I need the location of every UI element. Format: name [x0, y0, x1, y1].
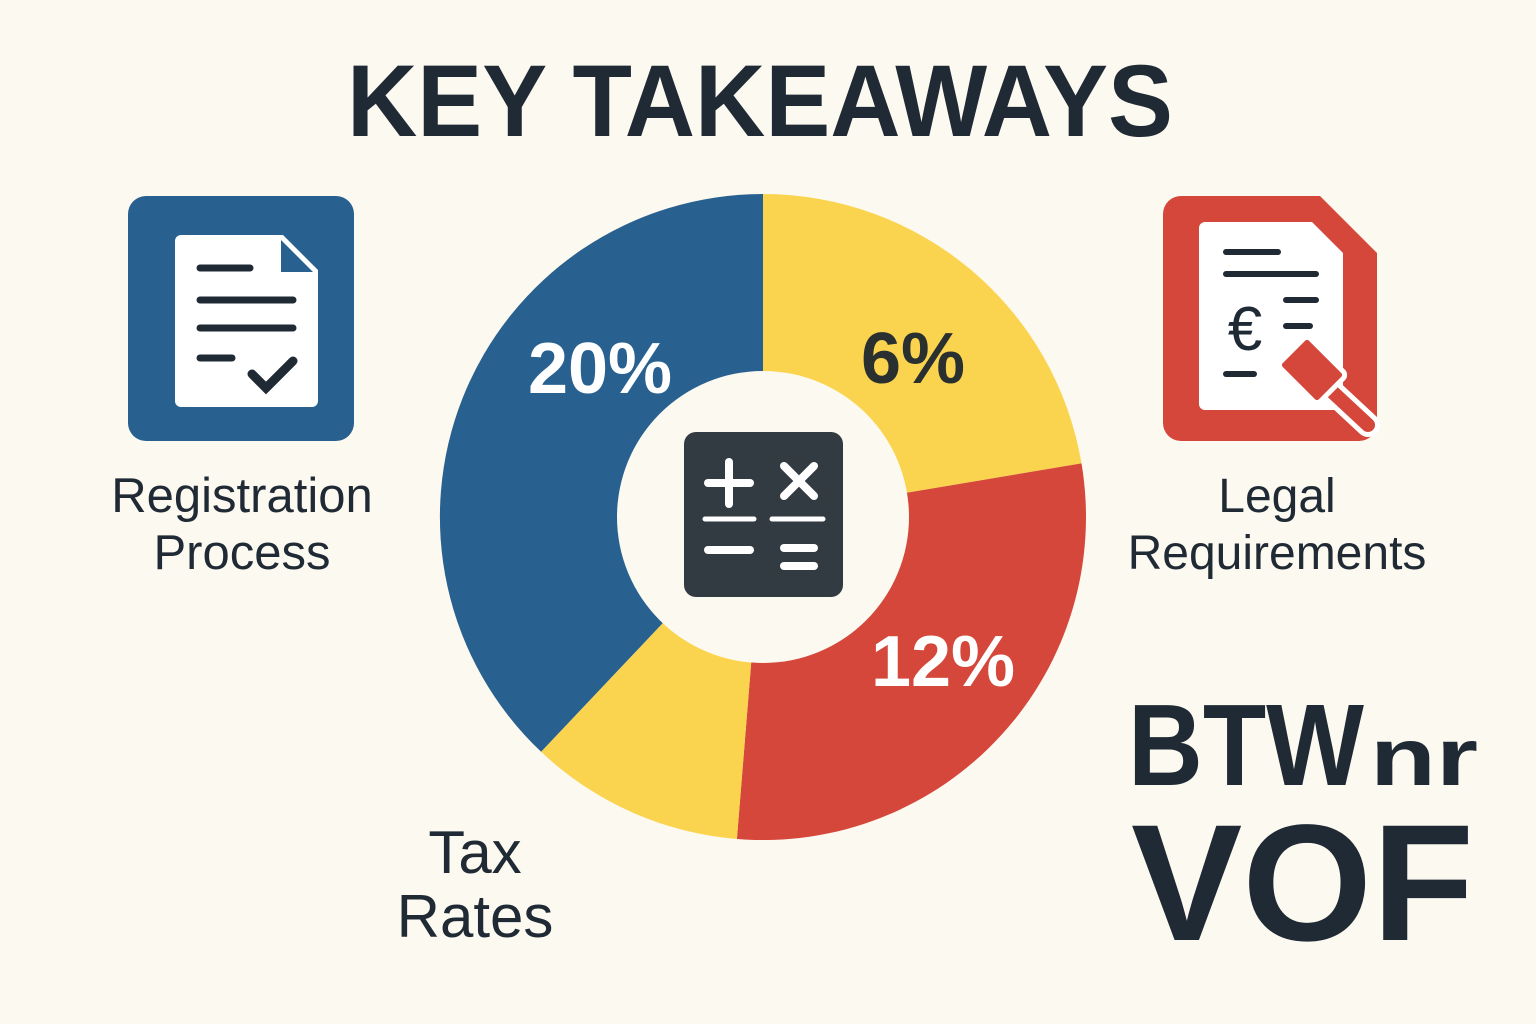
label: 6%: 6% [861, 319, 965, 399]
text: Registration Process: Registration [111, 469, 373, 523]
text: Legal Requirements: Requirements [1128, 527, 1426, 580]
chart: donut [440, 194, 1086, 840]
icon: registration document [128, 196, 354, 441]
icon: legal document: € [1228, 295, 1262, 364]
text: BTW nr VOF: BTW [1128, 680, 1364, 810]
label: 20%: 20% [528, 329, 672, 409]
text: BTW nr VOF: VOF [1131, 791, 1474, 976]
title: KEY TAKEAWAYS [347, 44, 1173, 158]
text: BTW nr VOF [1128, 680, 1478, 976]
text: Legal Requirements: Legal [1218, 470, 1336, 523]
text: Tax Rates: Rates [397, 883, 553, 950]
text: Registration Process: Process [153, 526, 331, 580]
text: BTW nr VOF: nr [1370, 712, 1478, 803]
icon: legal document [1163, 196, 1377, 441]
text: Tax Rates: Tax [428, 819, 522, 886]
label: 12%: 12% [871, 622, 1015, 702]
icon: calculator [684, 432, 843, 597]
